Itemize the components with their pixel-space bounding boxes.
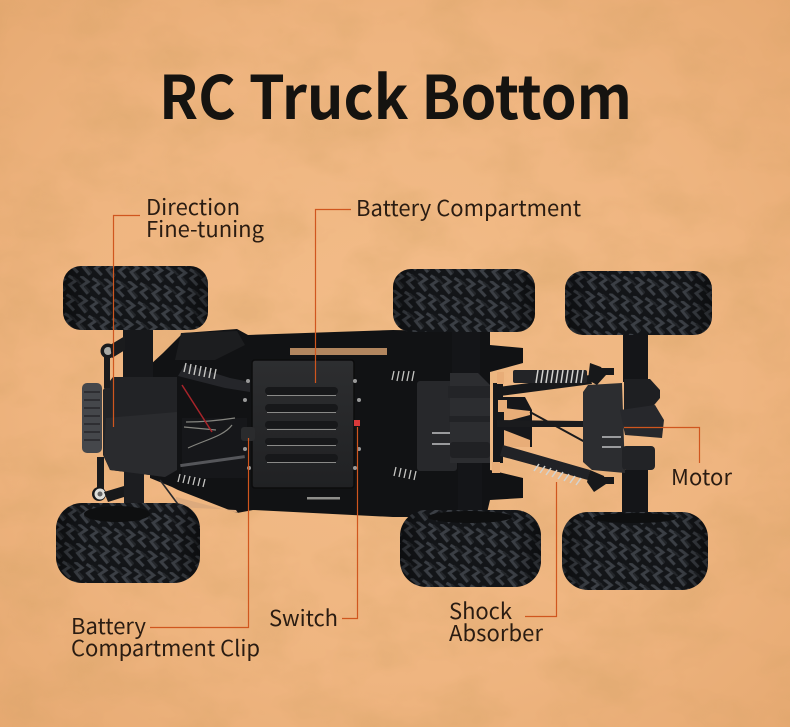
label: direction fine-tuning: Direction	[146, 190, 240, 222]
label: battery compartment clip: Battery	[71, 609, 147, 641]
label: battery compartment: Battery Compartment	[356, 191, 581, 223]
label: direction fine-tuning: Fine-tuning	[146, 212, 265, 244]
label: shock absorber: Absorber	[449, 616, 543, 648]
tyre: middle bottom	[400, 510, 541, 587]
rear axle and motor housing	[583, 334, 664, 517]
rear bracket	[492, 372, 532, 473]
rear link arms and springs	[497, 363, 614, 492]
tyre: middle top	[393, 269, 535, 332]
label: switch: Switch	[269, 601, 338, 633]
label: shock absorber: Shock	[449, 594, 512, 626]
middle axle and gearbox	[417, 330, 490, 517]
label: shock absorber	[449, 594, 543, 648]
label: battery compartment clip: Compartment Clip	[71, 631, 260, 663]
label: battery compartment clip	[71, 609, 260, 663]
tyre: rear top	[565, 271, 712, 335]
label: direction fine-tuning	[146, 190, 265, 244]
chassis body	[150, 329, 523, 517]
label: motor: Motor	[671, 460, 732, 492]
tyre: front top	[63, 266, 208, 330]
front axle and gearbox	[82, 328, 177, 516]
leader lines	[114, 210, 700, 628]
title: RC Truck Bottom	[159, 50, 632, 137]
chassis springs	[178, 363, 416, 487]
tyre: rear bottom	[562, 512, 708, 590]
battery cover	[241, 360, 361, 488]
tyre: front bottom	[56, 503, 200, 583]
RC truck underside	[56, 266, 712, 590]
chassis window	[290, 348, 387, 355]
